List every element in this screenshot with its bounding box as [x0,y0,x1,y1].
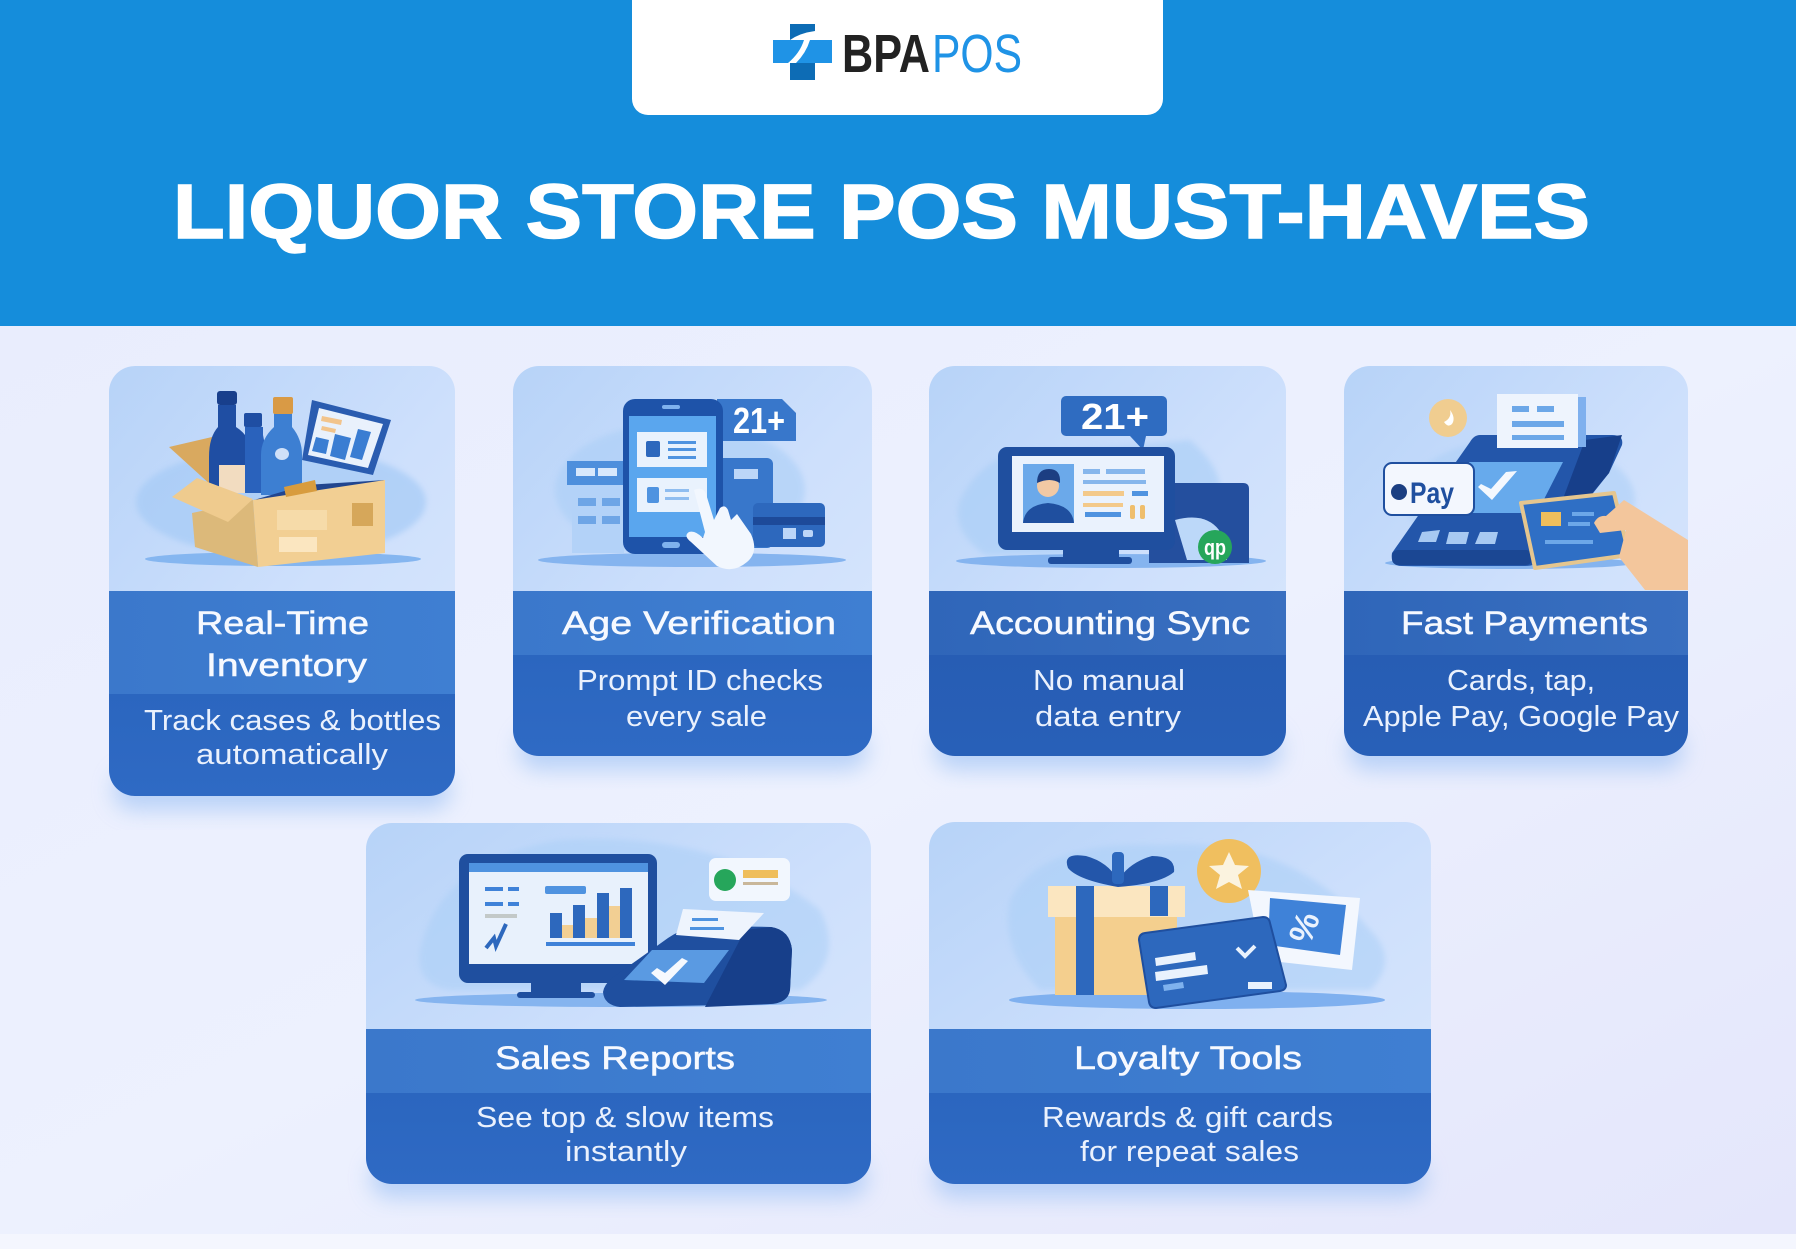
description: instantly [565,1136,688,1168]
illustration: box of bottles [136,391,426,567]
description: Apple Pay, Google Pay [1363,701,1680,733]
panel: accounting sync [929,366,1286,770]
illustration: monitor and id [956,396,1266,568]
heading: Accounting Sync [970,605,1250,641]
description [1042,1102,1333,1168]
description [1363,665,1680,733]
illustration: payment terminal [1384,394,1688,590]
header band [0,0,1796,326]
heading: Loyalty Tools [1074,1040,1302,1076]
illustration: gift and cards [1008,839,1385,1009]
illustration: phone id check [538,399,846,569]
panel: fast payments [1344,366,1688,770]
heading: Fast Payments [1401,605,1648,641]
illustration: monitor and id: 21+ [1081,396,1149,437]
panel: sales reports [366,823,871,1198]
heading: Sales Reports [495,1040,735,1076]
logo plate [632,0,1163,115]
heading: Inventory [206,647,367,683]
heading: Age Verification [562,605,836,641]
description: Prompt ID checks [577,665,823,697]
description: Rewards & gift cards [1042,1102,1333,1134]
description: Track cases & bottles [144,705,441,737]
heading: Real-Time [196,605,369,641]
description [1033,665,1185,733]
illustration: gift and cards: % [1282,907,1328,948]
description [144,705,441,771]
logo wordmark: BPA [842,24,930,84]
title: LIQUOR STORE POS MUST-HAVES [173,169,1590,255]
heading [196,605,369,683]
illustration: payment terminal: Pay [1410,477,1454,510]
description: for repeat sales [1080,1136,1299,1168]
panel: loyalty tools [929,822,1431,1198]
description: No manual [1033,665,1185,697]
description: data entry [1035,701,1182,733]
panel: age verification [513,366,872,770]
illustration: phone id check: 21+ [733,400,785,441]
page background [0,326,1796,1234]
description: Cards, tap, [1447,665,1595,697]
description: automatically [196,739,389,771]
footer strip [0,1234,1796,1249]
logo wordmark: POS [932,24,1022,84]
description [476,1102,774,1168]
description: every sale [626,701,767,733]
illustration: monitor and id: qp [1204,535,1226,560]
panel: real-time inventory [109,366,455,810]
icon: logo cross [773,24,832,80]
illustration: sales dashboard [415,839,829,1007]
description [577,665,823,733]
logo wordmark [842,24,1022,84]
description: See top & slow items [476,1102,774,1134]
